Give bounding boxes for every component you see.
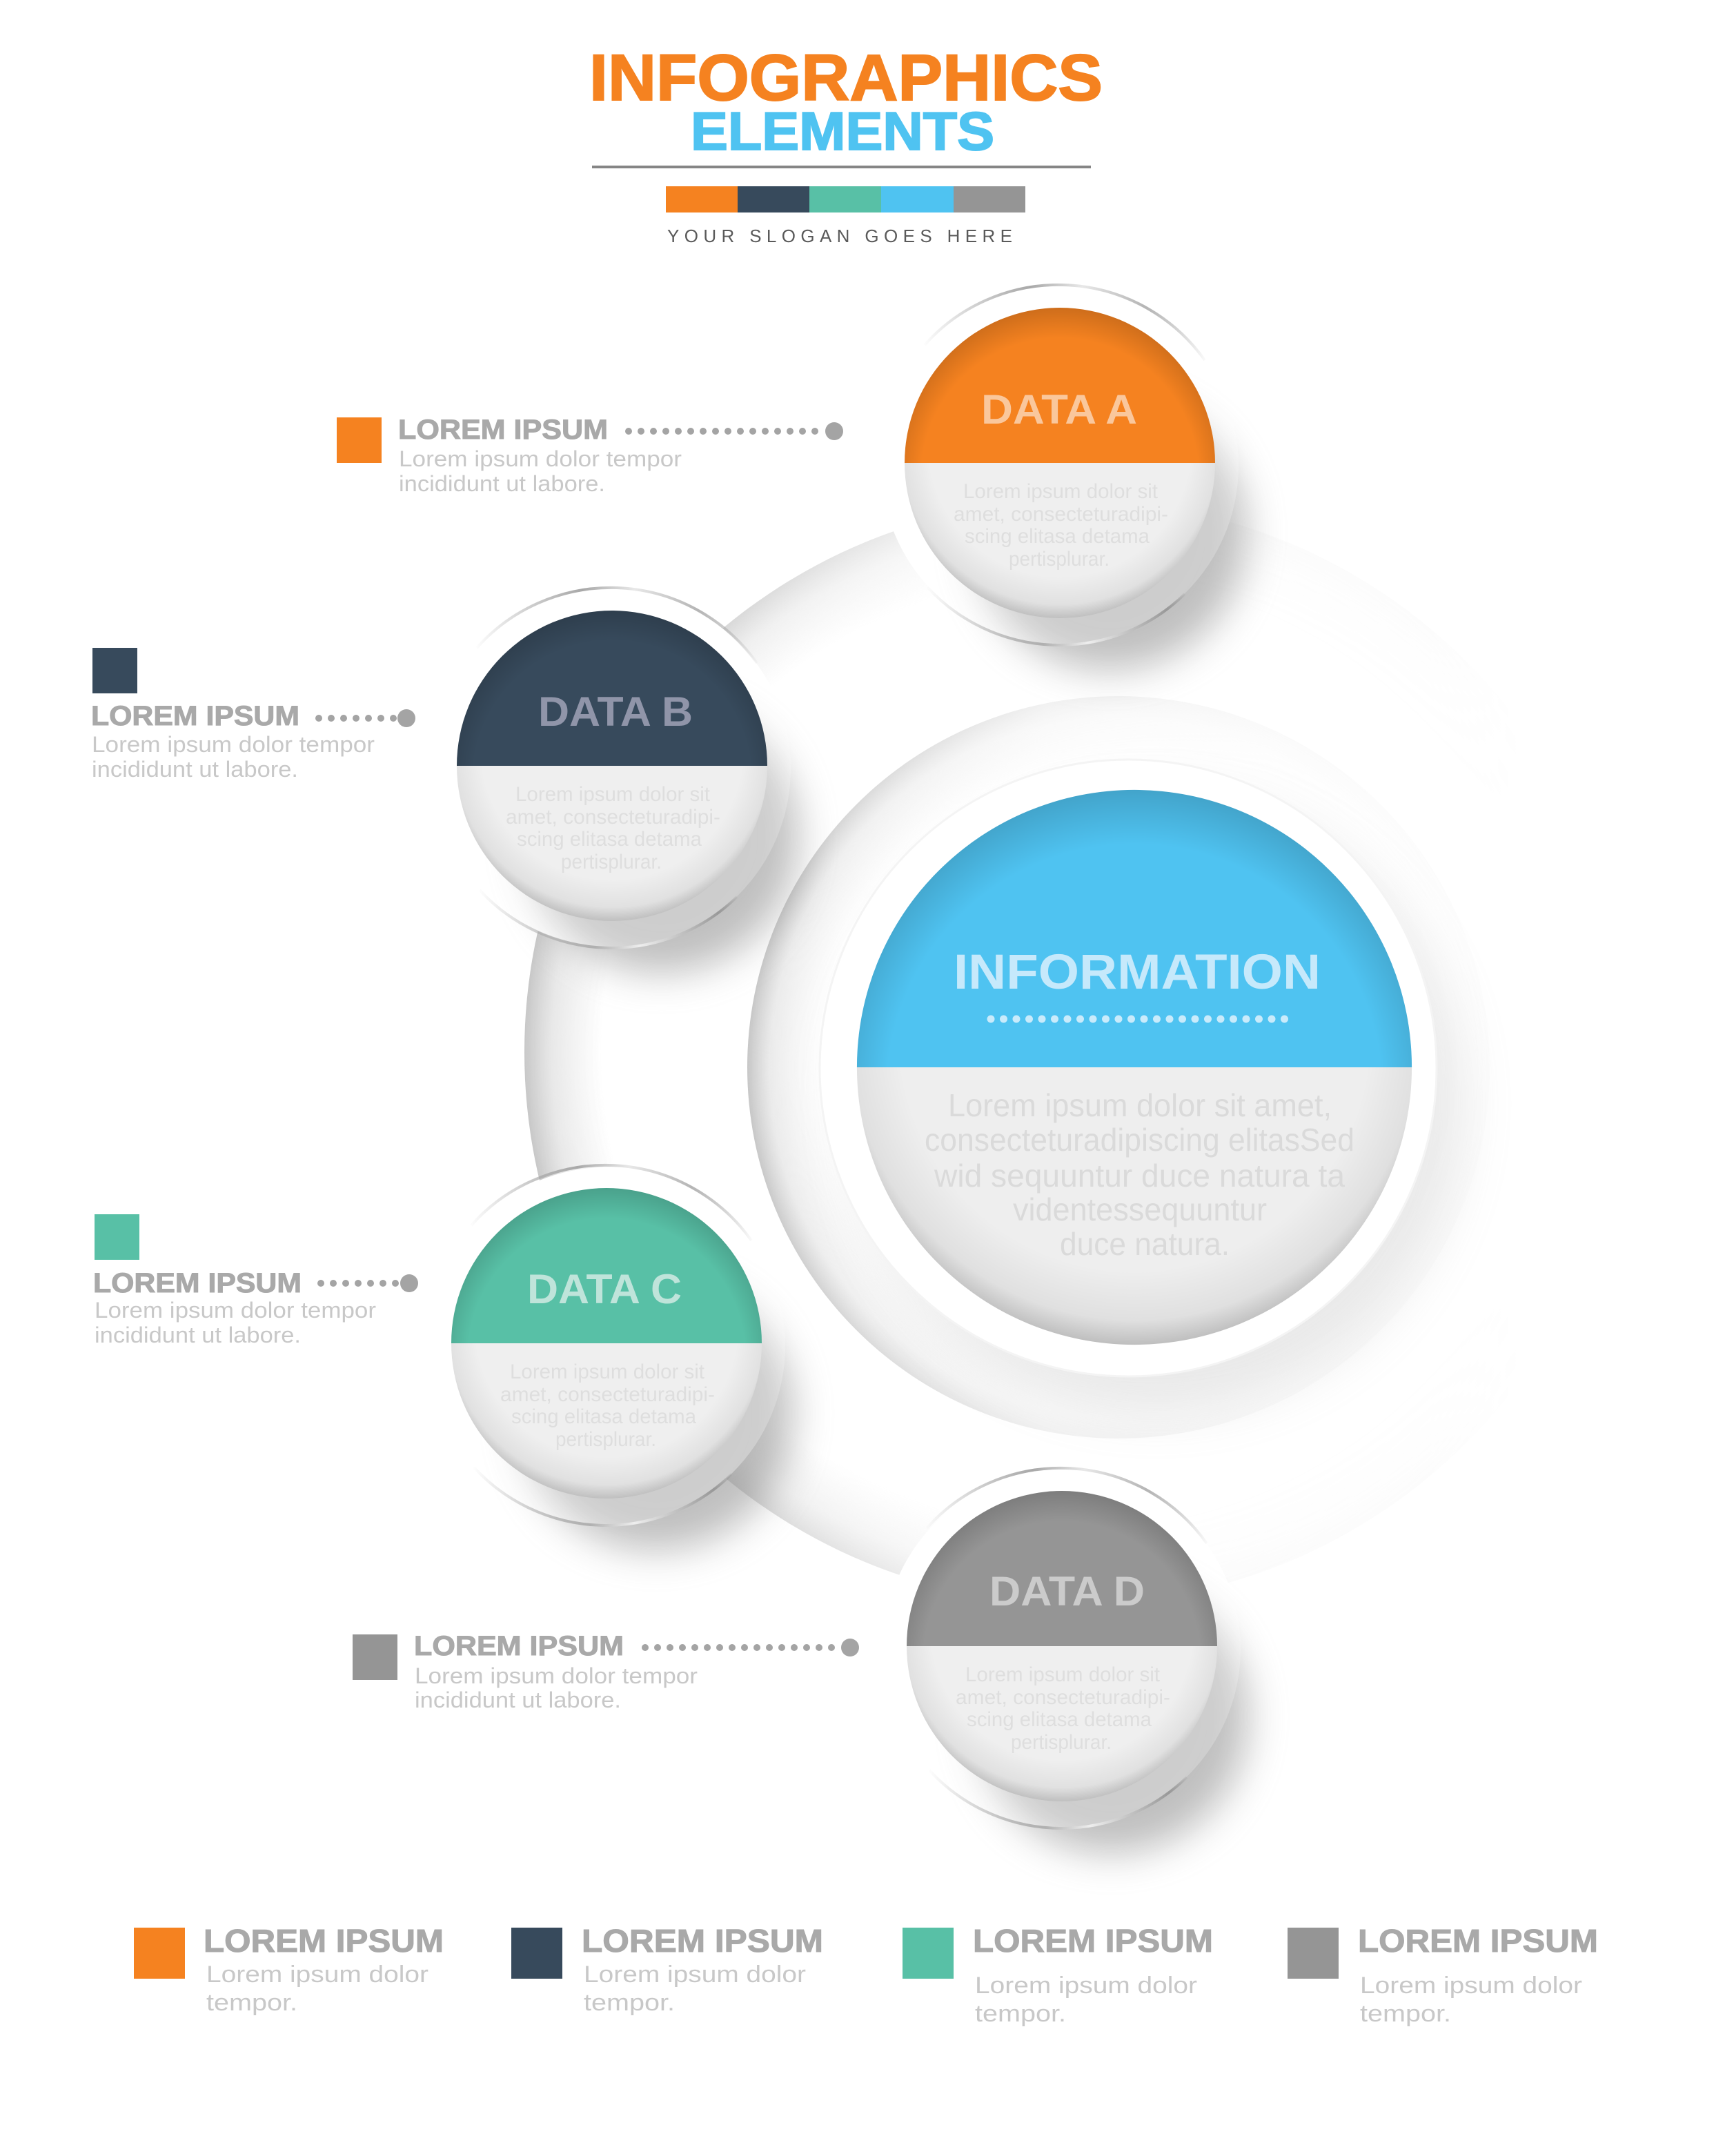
title block xyxy=(589,41,1103,246)
callout: data a xyxy=(337,415,843,496)
callout: data c: incididunt ut labore. xyxy=(95,1323,301,1347)
circle: data c: scing elitasa detama xyxy=(511,1405,696,1428)
information body text: consecteturadipiscing elitasSed xyxy=(925,1122,1354,1158)
legend item: orange xyxy=(134,1923,444,2016)
circle: data a: pertisplurar. xyxy=(1009,548,1110,571)
callout: data d: Lorem ipsum dolor tempor xyxy=(415,1663,698,1688)
legend item: green: Lorem ipsum dolor xyxy=(975,1972,1197,1999)
callout: data d: LOREM IPSUM xyxy=(414,1631,624,1661)
legend item: grey: tempor. xyxy=(1360,2001,1451,2027)
circle: data c: DATA C xyxy=(527,1266,682,1312)
callout: data a: LOREM IPSUM xyxy=(398,415,608,445)
legend item: green: tempor. xyxy=(975,2001,1066,2027)
callout: data c: Lorem ipsum dolor tempor xyxy=(95,1298,376,1323)
circle: data c xyxy=(428,1165,793,1550)
callout: data c xyxy=(93,1214,418,1347)
legend item: navy: LOREM IPSUM xyxy=(582,1923,823,1959)
circle: data b: amet, consecteturadipi- xyxy=(506,806,720,829)
callout: data b: incididunt ut labore. xyxy=(92,757,298,782)
information body text: wid sequuntur duce natura ta xyxy=(934,1158,1345,1194)
disc shadow xyxy=(847,795,1464,1412)
circle: data b: scing elitasa detama xyxy=(517,828,702,851)
legend item: orange: tempor. xyxy=(206,1990,297,2016)
information body text: Lorem ipsum dolor sit amet, xyxy=(948,1087,1332,1123)
circle: data a: amet, consecteturadipi- xyxy=(954,503,1168,526)
circle: data a xyxy=(881,285,1246,670)
colour swatch bar xyxy=(666,186,1025,212)
legend item: navy xyxy=(511,1923,823,2016)
information body text: videntessequuntur xyxy=(1013,1191,1267,1227)
information body text xyxy=(925,1087,1354,1262)
dotted divider xyxy=(991,1016,1297,1022)
callout: data d xyxy=(353,1631,859,1712)
circle: data a: scing elitasa detama xyxy=(965,525,1150,548)
legend item: grey xyxy=(1288,1923,1598,2027)
title rule xyxy=(592,166,1091,168)
circle: data d: amet, consecteturadipi- xyxy=(956,1686,1170,1709)
white disc xyxy=(820,760,1437,1376)
circle: data b xyxy=(433,588,798,973)
central information circle xyxy=(747,696,1490,1438)
circle: data a: Lorem ipsum dolor sit xyxy=(963,480,1159,503)
legend item: navy: tempor. xyxy=(584,1990,675,2016)
circle: data d: DATA D xyxy=(989,1568,1145,1614)
legend item: grey: LOREM IPSUM xyxy=(1358,1923,1598,1959)
information badge xyxy=(857,790,1412,1345)
circle: data d xyxy=(883,1468,1248,1853)
circle: data b: DATA B xyxy=(538,689,693,735)
circle: data d: scing elitasa detama xyxy=(967,1708,1152,1731)
callout: data b xyxy=(91,648,415,782)
slogan: YOUR SLOGAN GOES HERE xyxy=(667,226,1012,246)
information body text: duce natura. xyxy=(1060,1226,1230,1262)
title: infographics: INFOGRAPHICS xyxy=(589,41,1103,115)
circle: data b: pertisplurar. xyxy=(561,851,662,873)
circle: data b: Lorem ipsum dolor sit xyxy=(515,783,711,806)
callout: data c: LOREM IPSUM xyxy=(93,1268,302,1298)
legend item: grey: Lorem ipsum dolor xyxy=(1360,1972,1582,1999)
circle: data d: Lorem ipsum dolor sit xyxy=(965,1663,1161,1686)
legend item: orange: Lorem ipsum dolor xyxy=(206,1961,428,1988)
legend item: green xyxy=(903,1923,1213,2027)
outer halo ring xyxy=(747,696,1188,1438)
legend item: orange: LOREM IPSUM xyxy=(204,1923,444,1959)
large background ring xyxy=(524,531,911,1574)
legend item: green: LOREM IPSUM xyxy=(973,1923,1213,1959)
information heading: INFORMATION xyxy=(954,945,1321,1000)
circle: data c: Lorem ipsum dolor sit xyxy=(510,1361,705,1383)
callout: data a: Lorem ipsum dolor tempor xyxy=(399,446,682,471)
circle: data c: amet, consecteturadipi- xyxy=(500,1383,715,1406)
circle: data c: pertisplurar. xyxy=(555,1428,656,1451)
circle: data a: DATA A xyxy=(981,386,1137,433)
callout: data a: incididunt ut labore. xyxy=(399,471,605,496)
callout: data d: incididunt ut labore. xyxy=(415,1688,621,1712)
legend item: navy: Lorem ipsum dolor xyxy=(584,1961,806,1988)
circle: data d: pertisplurar. xyxy=(1011,1731,1112,1754)
subtitle: elements: ELEMENTS xyxy=(691,101,994,161)
callout: data b: LOREM IPSUM xyxy=(91,701,299,731)
callout: data b: Lorem ipsum dolor tempor xyxy=(92,732,375,757)
